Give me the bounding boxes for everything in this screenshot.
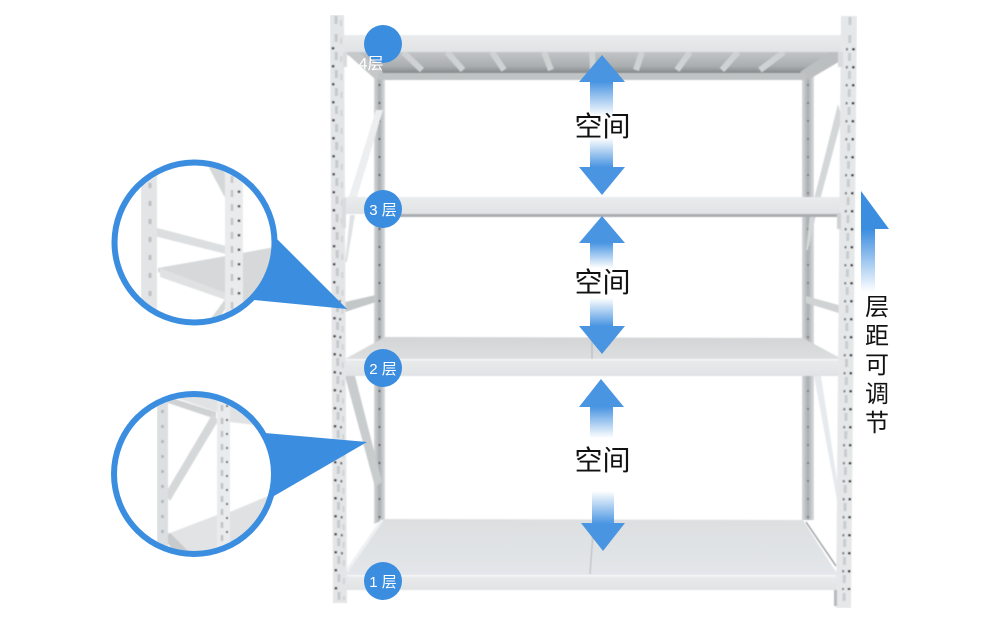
arrow: upper space down <box>579 138 625 195</box>
arrow: upper space up <box>579 55 625 116</box>
arrow: lower space down <box>581 491 625 551</box>
badge: level 4: 4层 <box>359 56 383 73</box>
callout: lower detail magnifier <box>114 392 367 560</box>
badge: level 2 <box>364 349 402 387</box>
label: adjustable spacing <box>865 294 889 437</box>
badge: level 1 <box>364 562 402 600</box>
magnifier ring <box>114 394 274 554</box>
magnified rack brace <box>157 397 268 551</box>
callout pointer <box>254 238 347 309</box>
shelf 1 <box>345 519 840 590</box>
shelving rack <box>330 15 857 608</box>
magnifier ring <box>114 162 274 322</box>
badge: level 2: 2 层 <box>369 361 397 378</box>
rear left post <box>374 72 385 524</box>
arrow: adjustable spacing <box>861 191 889 292</box>
arrow: lower space up <box>579 379 624 438</box>
label: adjustable spacing: 距 <box>865 323 889 350</box>
label: adjustable spacing: 可 <box>865 352 889 379</box>
magnified rack joint <box>141 166 272 318</box>
badge: level 3: 3 层 <box>369 202 397 219</box>
callout pointer <box>265 433 367 496</box>
badge: level 4 <box>359 25 402 73</box>
label: adjustable spacing: 调 <box>865 381 889 408</box>
label: adjustable spacing: 层 <box>865 294 889 321</box>
right front post <box>834 16 857 608</box>
badge: level 3 <box>364 190 402 228</box>
shelf 4: underside and ribs <box>343 52 842 80</box>
badge: level 1: 1 层 <box>369 574 397 591</box>
rear right post <box>802 72 814 520</box>
label: adjustable spacing: 节 <box>865 410 889 437</box>
shelf 4 front beam <box>342 35 842 52</box>
label: middle space: 空间 <box>574 267 631 298</box>
shelf 3 <box>342 197 842 217</box>
label: lower space: 空间 <box>574 445 631 476</box>
callout: upper detail magnifier <box>114 160 347 330</box>
side braces <box>345 104 842 500</box>
shelf 2 <box>344 337 842 376</box>
arrow: middle space up <box>579 216 625 268</box>
left front post <box>330 15 347 603</box>
label: upper space: 空间 <box>574 111 631 142</box>
arrow: middle space down <box>579 298 625 354</box>
